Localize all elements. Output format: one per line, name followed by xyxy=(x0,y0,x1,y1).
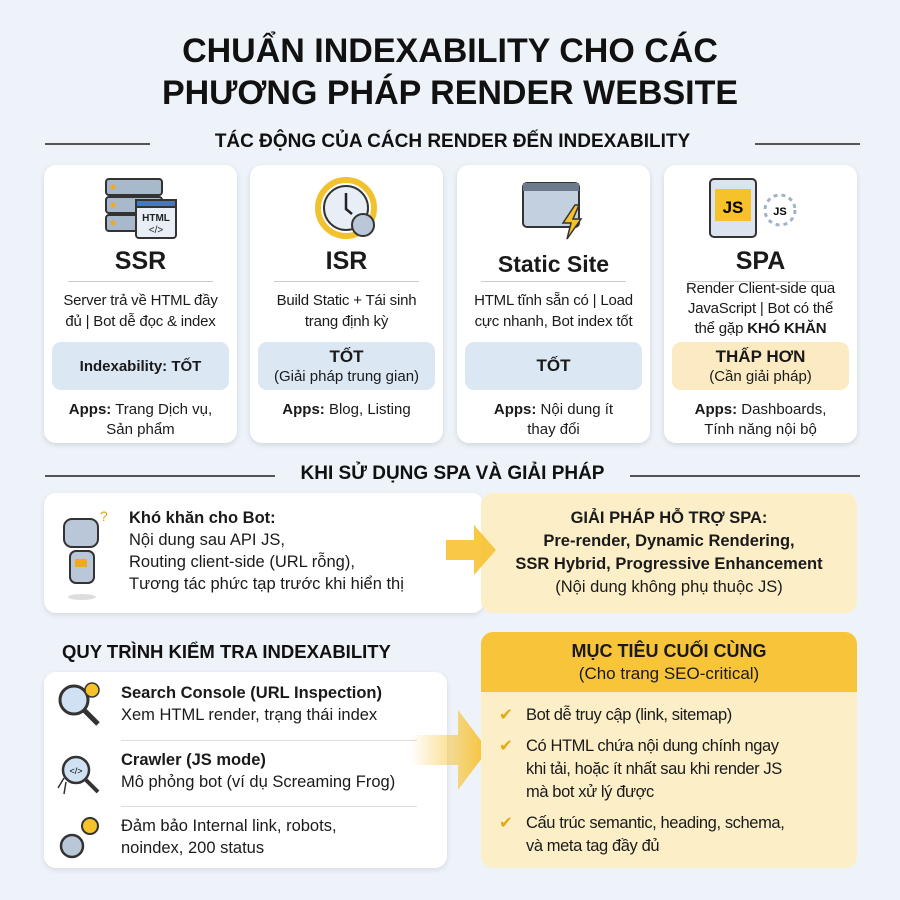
icon: JS browser xyxy=(709,178,796,238)
card: Static Site: Static Site xyxy=(498,251,609,277)
goal checklist: mà bot xử lý được xyxy=(526,783,654,801)
panel: check process: Mô phỏng bot (ví dụ Screaming Frog) xyxy=(121,773,395,791)
panel: check process: Crawler (JS mode) xyxy=(121,751,266,769)
card: SPA: Render Client-side qua JavaScript | Bot có thể thể gặp KHÓ KHĂN xyxy=(686,280,835,337)
card: ISR: Build Static + Tái sinh trang định kỳ xyxy=(277,292,416,330)
icon: robot xyxy=(63,508,108,600)
card: ISR: ISR xyxy=(326,247,367,275)
icon: gears xyxy=(60,817,99,858)
goal header xyxy=(481,632,857,692)
card: SPA: SPA xyxy=(736,247,785,275)
card: Static Site: HTML tĩnh sẵn có | Load cực nhanh, Bot index tốt xyxy=(474,292,633,330)
card: ISR: (Giải pháp trung gian) xyxy=(274,368,419,384)
title xyxy=(162,31,738,112)
icon: JS browser: JS xyxy=(773,206,787,218)
panel: bot difficulties xyxy=(44,493,484,613)
panel: bot difficulties: Routing client-side (URL rỗng), xyxy=(129,553,355,571)
panel: bot difficulties: Tương tác phức tạp trước khi hiển thị xyxy=(129,575,404,593)
title: PHƯƠNG PHÁP RENDER WEBSITE xyxy=(162,74,738,112)
card: SSR: Indexability: TỐT xyxy=(80,358,201,374)
icon: crawler: </> xyxy=(69,766,83,776)
goal checklist: và meta tag đầy đủ xyxy=(526,837,659,855)
panel: check process xyxy=(44,672,447,868)
section heading: impact: TÁC ĐỘNG CỦA CÁCH RENDER ĐẾN INDEXABILITY xyxy=(215,131,690,152)
heading: check process: QUY TRÌNH KIỂM TRA INDEXABILITY xyxy=(62,641,391,662)
panel: check process: Search Console (URL Inspection) xyxy=(121,684,382,702)
icon: JS browser: JS xyxy=(723,198,743,217)
goal header: MỤC TIÊU CUỐI CÙNG xyxy=(572,641,766,661)
card: SSR: Server trả về HTML đầy đủ | Bot dễ đọc & index xyxy=(63,292,218,330)
icon: server html: </> xyxy=(149,225,163,236)
panel: check process: Xem HTML render, trạng thái index xyxy=(121,706,377,724)
goal checklist: khi tải, hoặc ít nhất sau khi render JS xyxy=(526,760,782,778)
icon: magnifier gear xyxy=(58,682,100,726)
panel: SPA solutions: SSR Hybrid, Progressive Enhancement xyxy=(515,555,823,573)
card: SPA xyxy=(664,165,857,443)
card: ISR: Apps: Blog, Listing xyxy=(282,401,411,418)
panel: SPA solutions: (Nội dung không phụ thuộc JS) xyxy=(555,578,783,596)
title: CHUẨN INDEXABILITY CHO CÁC xyxy=(182,32,718,70)
card: SPA: Apps: Dashboards, Tính năng nội bộ xyxy=(695,401,826,438)
goal header: (Cho trang SEO-critical) xyxy=(579,664,759,683)
arrow: to goal xyxy=(413,710,481,790)
goal checklist: Cấu trúc semantic, heading, schema, xyxy=(526,814,784,832)
icon: server html xyxy=(105,178,177,239)
icon: robot: ? xyxy=(100,508,108,524)
card: SPA: (Cần giải pháp) xyxy=(709,368,812,384)
panel: SPA solutions xyxy=(481,493,857,613)
panel: final goal xyxy=(481,632,857,868)
icon: server html: HTML xyxy=(142,213,170,224)
goal checklist: ✔ xyxy=(499,737,512,755)
card: Static Site: Apps: Nội dung ít thay đổi xyxy=(494,401,613,438)
arrow: to solutions xyxy=(446,525,496,575)
goal checklist: ✔ xyxy=(499,706,512,724)
section heading: SPA: KHI SỬ DỤNG SPA VÀ GIẢI PHÁP xyxy=(301,463,604,484)
card: Static Site xyxy=(457,165,650,443)
goal checklist: ✔ xyxy=(499,814,512,832)
card: ISR: TỐT xyxy=(330,346,364,366)
card: SSR: SSR xyxy=(115,247,166,275)
card: SSR xyxy=(44,165,237,443)
card: SSR: Apps: Trang Dịch vụ, Sản phẩm xyxy=(69,401,212,438)
panel: SPA solutions: Pre-render, Dynamic Rendering, xyxy=(543,532,795,550)
panel: bot difficulties: Khó khăn cho Bot: xyxy=(129,509,276,527)
card: Static Site: TỐT xyxy=(536,356,570,375)
panel: bot difficulties: Nội dung sau API JS, xyxy=(129,531,285,549)
panel: SPA solutions: GIẢI PHÁP HỖ TRỢ SPA: xyxy=(571,509,767,527)
icon: browser lightning xyxy=(522,182,582,240)
icon: crawler xyxy=(57,756,100,794)
panel: check process: Đảm bảo Internal link, robots, xyxy=(121,817,337,835)
panel: check process: noindex, 200 status xyxy=(121,839,264,857)
card: SPA: THẤP HƠN xyxy=(716,346,805,366)
icon: clock refresh xyxy=(315,177,377,239)
goal checklist: Bot dễ truy cập (link, sitemap) xyxy=(526,706,732,724)
card: ISR xyxy=(250,165,443,443)
goal checklist xyxy=(499,705,784,855)
goal checklist: Có HTML chứa nội dung chính ngay xyxy=(526,737,779,755)
